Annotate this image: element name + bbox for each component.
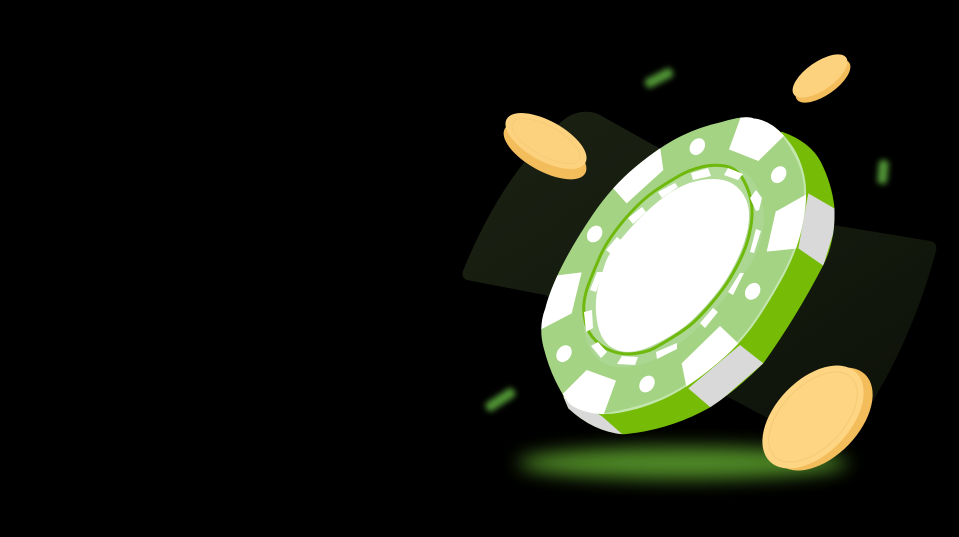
poker chip — [541, 117, 834, 434]
coin bottom right — [743, 347, 892, 489]
coin top right — [786, 46, 857, 111]
ring dashes — [584, 168, 762, 365]
green ring — [584, 165, 752, 354]
inner light band — [583, 164, 764, 367]
chip dots — [553, 135, 790, 395]
illustration: casino chip with coins — [462, 54, 936, 492]
edge notches — [541, 117, 806, 414]
blurred dash top — [643, 67, 675, 89]
background curved panel — [462, 112, 936, 430]
blurred dash left — [484, 387, 517, 413]
ground glow — [518, 447, 848, 479]
blurred dash right — [877, 160, 889, 184]
chip side — [563, 132, 834, 434]
chip side and face outer — [541, 117, 834, 434]
chip face — [541, 117, 806, 414]
chip center — [596, 179, 749, 352]
coin top left — [495, 102, 595, 191]
